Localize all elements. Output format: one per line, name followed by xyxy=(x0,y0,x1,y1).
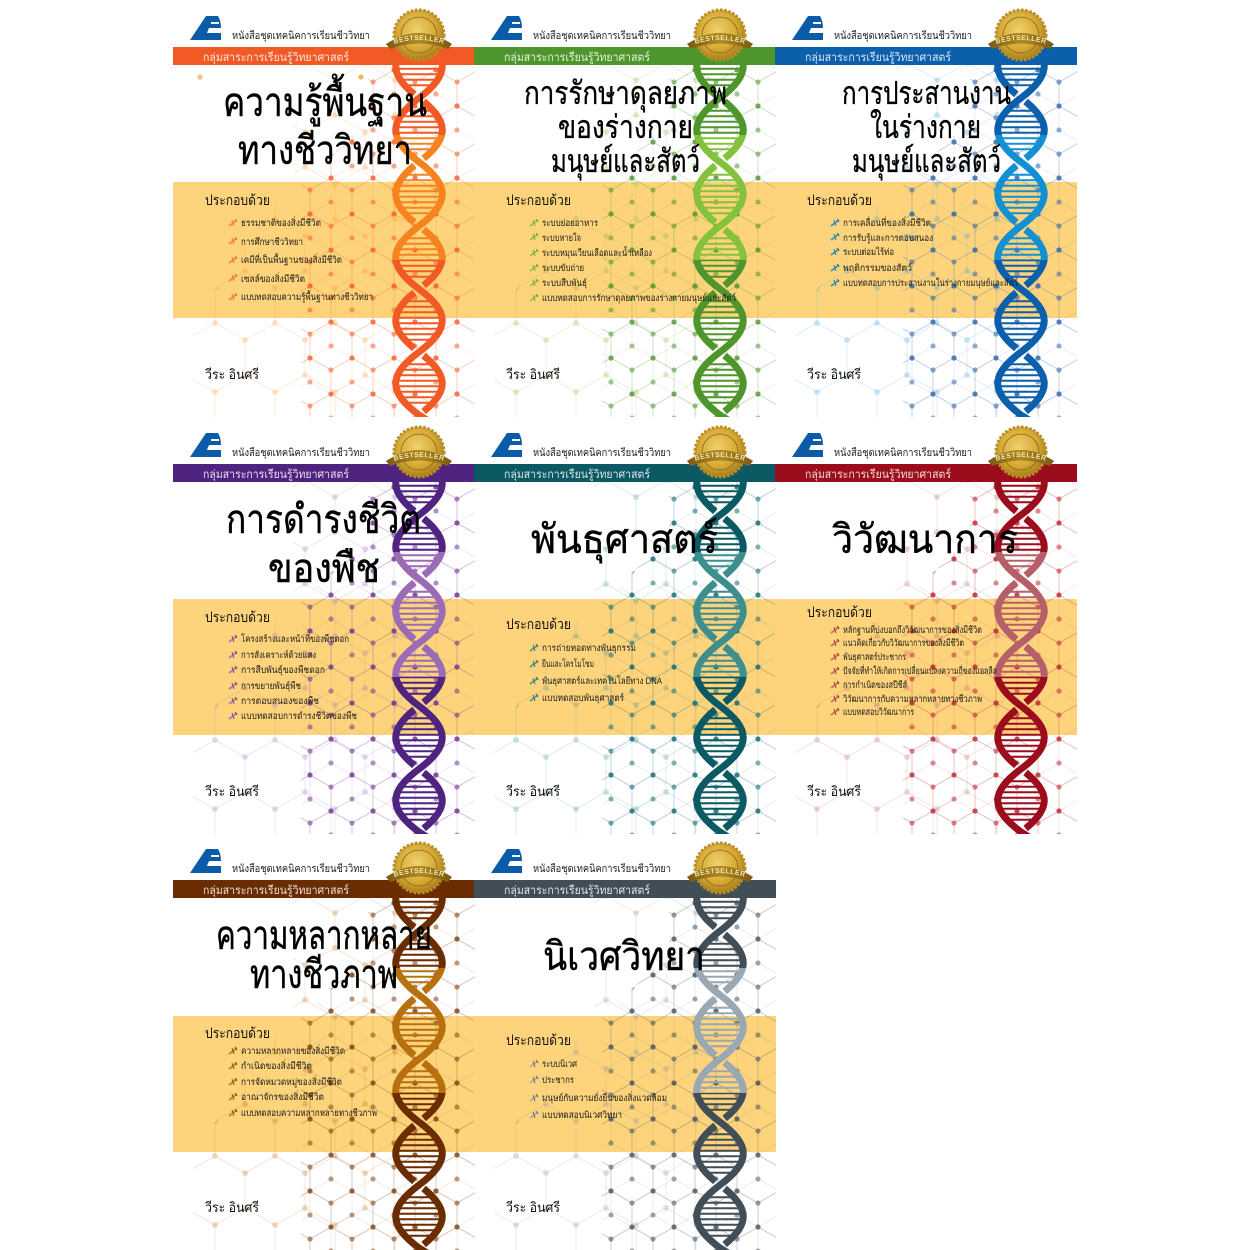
contents list: หลักฐานที่บ่งบอกถึงวิวัฒนาการของสิ่งมีชีวิต xyxy=(843,623,982,636)
molecule pattern xyxy=(193,898,475,1250)
contents list xyxy=(530,218,736,304)
contents heading: ประกอบด้วย xyxy=(807,192,872,208)
contents list: การสังเคราะห์ด้วยแสง xyxy=(241,649,316,661)
contents list: กำเนิดของสิ่งมีชีวิต xyxy=(241,1059,312,1072)
bestseller seal xyxy=(386,10,452,60)
book title xyxy=(223,73,427,173)
contents list xyxy=(530,643,663,704)
book title xyxy=(842,75,1011,181)
series name: หนังสือชุดเทคนิคการเรียนชีววิทยา xyxy=(834,29,972,42)
subject band xyxy=(173,47,475,65)
contents list: ประชากร xyxy=(542,1075,574,1086)
contents heading: ประกอบด้วย xyxy=(506,1032,571,1048)
contents list xyxy=(229,632,357,722)
DNA helix xyxy=(697,34,744,430)
contents list xyxy=(229,1044,377,1119)
subject band xyxy=(474,880,776,898)
bestseller seal xyxy=(386,427,452,477)
contents list: พฤติกรรมของสัตว์ xyxy=(843,262,912,274)
contents list: แบบทดสอบวิวัฒนาการ xyxy=(843,707,914,718)
bestseller seal xyxy=(687,843,753,893)
series name: หนังสือชุดเทคนิคการเรียนชีววิทยา xyxy=(232,446,370,459)
contents heading: ประกอบด้วย xyxy=(506,192,571,208)
molecule pattern xyxy=(795,65,1077,417)
contents list: ความหลากหลายของสิ่งมีชีวิต xyxy=(241,1044,345,1057)
contents list: ระบบหมุนเวียนเลือดและน้ำเหลือง xyxy=(542,246,652,259)
contents list: แบบทดสอบนิเวศวิทยา xyxy=(542,1110,622,1121)
molecule pattern xyxy=(193,482,475,834)
book title: ความหลากหลาย xyxy=(216,914,432,958)
author: วีระ อินศรี xyxy=(807,784,861,799)
contents list xyxy=(530,1059,667,1121)
logo xyxy=(190,849,221,873)
subject label: กลุ่มสาระการเรียนรู้วิทยาศาสตร์ xyxy=(805,50,951,64)
book title xyxy=(524,75,727,181)
DNA helix xyxy=(998,34,1045,430)
panel: genetics xyxy=(474,427,776,847)
molecule pattern xyxy=(494,65,776,417)
book title: ของพืช xyxy=(268,547,380,591)
book title: ทางชีววิทยา xyxy=(238,129,412,173)
contents list: การกำเนิดของสปีชีส์ xyxy=(843,679,907,691)
contents list: พันธุศาสตร์ประชากร xyxy=(843,651,906,663)
contents list: การจัดหมวดหมู่ของสิ่งมีชีวิต xyxy=(241,1075,342,1088)
book title xyxy=(226,498,421,591)
contents list: ยีนและโครโมโซม xyxy=(542,658,594,670)
contents list: ธรรมชาติของสิ่งมีชีวิต xyxy=(241,216,321,229)
bestseller seal xyxy=(988,427,1054,477)
DNA helix xyxy=(396,451,443,847)
series name: หนังสือชุดเทคนิคการเรียนชีววิทยา xyxy=(834,446,972,459)
book title: นิเวศวิทยา xyxy=(543,935,705,979)
panel: plant life xyxy=(173,427,475,847)
DNA helix xyxy=(998,451,1045,847)
subject label: กลุ่มสาระการเรียนรู้วิทยาศาสตร์ xyxy=(805,467,951,481)
contents list: การขยายพันธุ์พืช xyxy=(241,680,301,692)
contents list: ระบบสืบพันธุ์ xyxy=(542,277,587,289)
contents list: วิวัฒนาการกับความหลากหลายทางชีวภาพ xyxy=(842,693,982,705)
logo xyxy=(792,433,823,457)
contents heading: ประกอบด้วย xyxy=(205,609,270,625)
contents list: การถ่ายทอดทางพันธุกรรม xyxy=(542,643,636,654)
author: วีระ อินศรี xyxy=(807,367,861,382)
author: วีระ อินศรี xyxy=(506,1200,560,1215)
series name: หนังสือชุดเทคนิคการเรียนชีววิทยา xyxy=(533,446,671,459)
book title: การประสานงาน xyxy=(842,75,1011,111)
subject band xyxy=(474,47,776,65)
content band xyxy=(474,182,776,318)
author: วีระ อินศรี xyxy=(205,367,259,382)
subject label: กลุ่มสาระการเรียนรู้วิทยาศาสตร์ xyxy=(203,883,349,897)
contents heading: ประกอบด้วย xyxy=(205,1025,270,1041)
subject band xyxy=(775,47,1077,65)
DNA helix xyxy=(697,867,744,1250)
contents list xyxy=(831,623,997,718)
logo xyxy=(190,433,221,457)
subject label: กลุ่มสาระการเรียนรู้วิทยาศาสตร์ xyxy=(504,467,650,481)
author: วีระ อินศรี xyxy=(205,1200,259,1215)
molecule pattern xyxy=(795,482,1077,834)
book title: พันธุศาสตร์ xyxy=(531,517,718,564)
contents heading: ประกอบด้วย xyxy=(506,616,571,632)
subject band xyxy=(775,464,1077,482)
subject band xyxy=(173,880,475,898)
contents list: ระบบขับถ่าย xyxy=(542,263,584,274)
series name: หนังสือชุดเทคนิคการเรียนชีววิทยา xyxy=(533,862,671,875)
subject band xyxy=(173,464,475,482)
panel: homeostasis xyxy=(474,10,776,430)
contents list: แบบทดสอบความหลากหลายทางชีวภาพ xyxy=(241,1107,377,1119)
content band xyxy=(173,182,475,318)
bestseller seal xyxy=(386,843,452,893)
contents list: แบบทดสอบความรู้พื้นฐานทางชีววิทยา xyxy=(241,290,373,303)
contents list xyxy=(229,216,373,303)
content band xyxy=(775,599,1077,735)
series name: หนังสือชุดเทคนิคการเรียนชีววิทยา xyxy=(533,29,671,42)
contents list: การรับรู้และการตอบสนอง xyxy=(843,233,933,244)
DNA helix xyxy=(396,867,443,1250)
contents list: แบบทดสอบการรักษาดุลยภาพของร่างกายมนุษย์และสัตว์ xyxy=(542,292,736,304)
logo xyxy=(190,16,221,40)
contents list: ระบบย่อยอาหาร xyxy=(542,218,598,229)
book title: มนุษย์และสัตว์ xyxy=(551,143,700,181)
content band xyxy=(173,1016,475,1152)
content band xyxy=(775,182,1077,318)
panel: coordination xyxy=(775,10,1077,430)
DNA helix xyxy=(396,34,443,430)
DNA helix xyxy=(697,451,744,847)
bestseller seal xyxy=(988,10,1054,60)
bestseller seal xyxy=(687,10,753,60)
book title: ความรู้พื้นฐาน xyxy=(223,73,427,127)
content band xyxy=(474,1016,776,1152)
panel: evolution xyxy=(775,427,1077,847)
subject label: กลุ่มสาระการเรียนรู้วิทยาศาสตร์ xyxy=(504,50,650,64)
contents heading: ประกอบด้วย xyxy=(807,604,872,620)
bestseller seal xyxy=(687,427,753,477)
author: วีระ อินศรี xyxy=(506,367,560,382)
contents list: การตอบสนองของพืช xyxy=(241,696,319,707)
logo xyxy=(491,16,522,40)
contents list: แบบทดสอบการดำรงชีวิตของพืช xyxy=(241,710,357,722)
contents list: พันธุศาสตร์และเทคโนโลยีทาง DNA xyxy=(542,675,663,687)
contents list xyxy=(831,216,1018,289)
contents list: แบบทดสอบการประสานงานในร่างกายมนุษย์และสัตว์ xyxy=(843,277,1018,289)
book title: การดำรงชีวิต xyxy=(226,498,421,542)
contents list: ระบบต่อมไร้ท่อ xyxy=(843,246,894,258)
panel: biodiversity xyxy=(173,843,475,1250)
book title: วิวัฒนาการ xyxy=(832,518,1018,562)
contents list: การศึกษาชีววิทยา xyxy=(241,236,303,248)
molecule pattern xyxy=(494,482,776,834)
content band xyxy=(173,599,475,735)
contents list: มนุษย์กับความยั่งยืนของสิ่งแวดล้อม xyxy=(542,1091,667,1104)
molecule pattern xyxy=(494,898,776,1250)
contents list: แนวคิดเกี่ยวกับวิวัฒนาการของสิ่งมีชีวิต xyxy=(843,636,964,649)
contents list: การเคลื่อนที่ของสิ่งมีชีวิต xyxy=(843,216,931,229)
book title: การรักษาดุลยภาพ xyxy=(524,75,727,113)
molecule pattern xyxy=(193,65,475,417)
subject band xyxy=(474,464,776,482)
panel: basic biology xyxy=(173,10,475,430)
logo xyxy=(491,433,522,457)
contents list: เคมีที่เป็นพื้นฐานของสิ่งมีชีวิต xyxy=(241,253,342,266)
contents list: ระบบหายใจ xyxy=(542,232,581,244)
content band xyxy=(474,599,776,735)
contents list: ปัจจัยที่ทำให้เกิดการเปลี่ยนแปลงความถี่ของแอลลีล xyxy=(843,664,997,677)
series name: หนังสือชุดเทคนิคการเรียนชีววิทยา xyxy=(232,862,370,875)
book title: ของร่างกาย xyxy=(558,109,693,145)
book title: มนุษย์และสัตว์ xyxy=(852,143,1001,181)
subject label: กลุ่มสาระการเรียนรู้วิทยาศาสตร์ xyxy=(504,883,650,897)
contents list: แบบทดสอบพันธุศาสตร์ xyxy=(542,692,624,704)
contents list: การสืบพันธุ์ของพืชดอก xyxy=(241,664,325,676)
contents list: โครงสร้างและหน้าที่ของพืชดอก xyxy=(241,632,349,645)
subject label: กลุ่มสาระการเรียนรู้วิทยาศาสตร์ xyxy=(203,467,349,481)
series name: หนังสือชุดเทคนิคการเรียนชีววิทยา xyxy=(232,29,370,42)
logo xyxy=(491,849,522,873)
contents heading: ประกอบด้วย xyxy=(205,192,270,208)
book title xyxy=(216,914,432,997)
logo xyxy=(792,16,823,40)
book title: ทางชีวภาพ xyxy=(250,953,398,997)
contents list: เซลล์ของสิ่งมีชีวิต xyxy=(241,272,305,285)
author: วีระ อินศรี xyxy=(506,784,560,799)
panel: ecology xyxy=(474,843,776,1250)
subject label: กลุ่มสาระการเรียนรู้วิทยาศาสตร์ xyxy=(203,50,349,64)
contents list: ระบบนิเวศ xyxy=(542,1059,577,1070)
author: วีระ อินศรี xyxy=(205,784,259,799)
contents list: อาณาจักรของสิ่งมีชีวิต xyxy=(241,1090,324,1103)
book title: ในร่างกาย xyxy=(870,109,981,145)
